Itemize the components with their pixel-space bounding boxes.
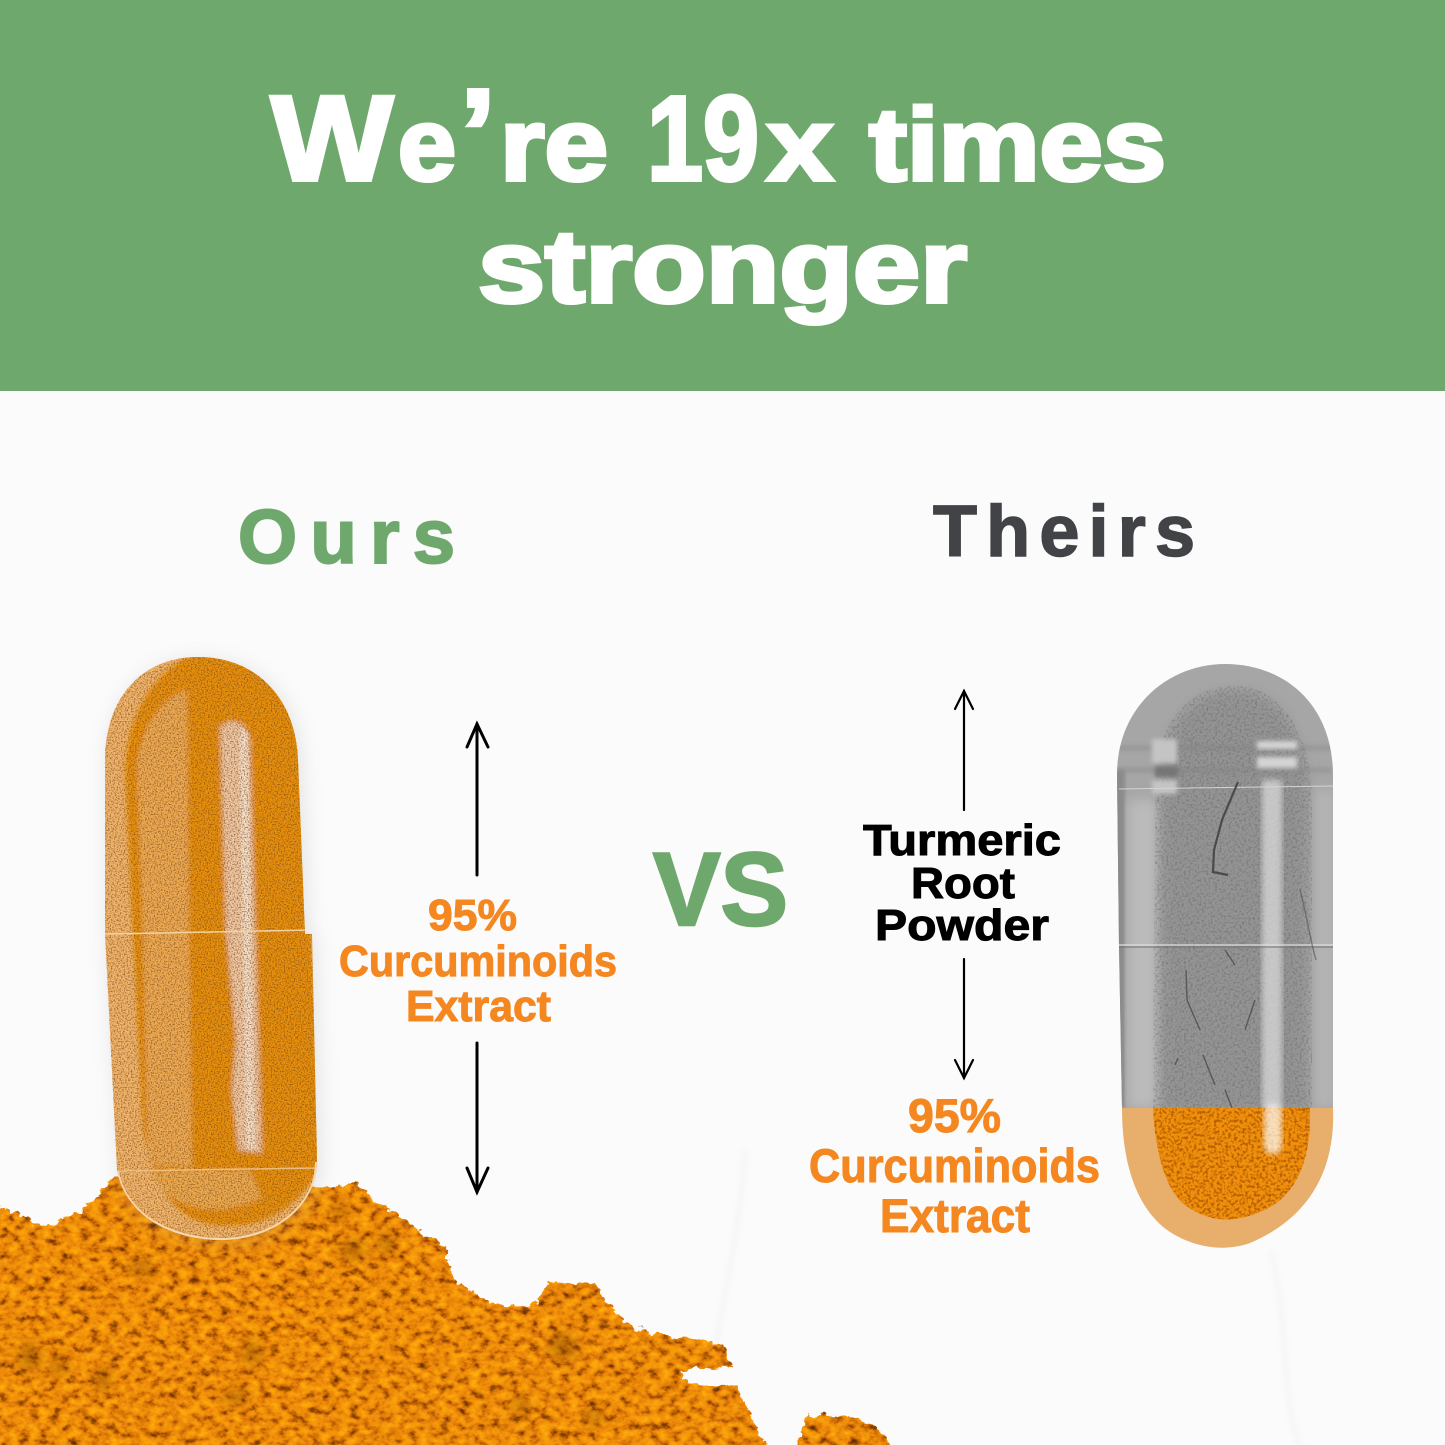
arrow: theirs up	[955, 691, 973, 810]
title: re	[500, 87, 608, 202]
label: turmeric root powder: Powder	[875, 901, 1049, 950]
label: theirs extract: 95%	[908, 1089, 1001, 1142]
orange base	[1122, 1102, 1334, 1248]
capsule: ours	[95, 650, 325, 1250]
arrow: ours down	[467, 1043, 488, 1192]
label: turmeric root powder: Turmeric	[863, 816, 1061, 865]
label: theirs extract: Curcuminoids	[809, 1139, 1100, 1192]
heading: Ours: Ours	[238, 495, 455, 580]
grey upper shell	[1108, 660, 1340, 1112]
heading: Theirs: Theirs	[933, 492, 1195, 572]
title: ’	[460, 64, 496, 203]
label: ours extract: 95%	[428, 891, 517, 940]
powder cracks	[1175, 782, 1316, 1108]
label: theirs extract: Extract	[880, 1189, 1030, 1242]
label: turmeric root powder: Root	[911, 859, 1015, 908]
title: e	[398, 87, 456, 202]
header band	[0, 0, 1445, 391]
powder pile	[0, 1177, 902, 1445]
label: theirs extract	[809, 1089, 1100, 1242]
title: W	[271, 70, 394, 206]
title: times	[869, 87, 1166, 202]
arrow: ours up	[467, 724, 488, 875]
title: stronger	[478, 209, 967, 324]
label: ours extract: Curcuminoids	[339, 937, 617, 986]
label: turmeric root powder	[863, 816, 1061, 950]
arrow: theirs down	[955, 959, 973, 1078]
paper background	[0, 391, 1445, 1445]
title: x	[767, 87, 833, 202]
label: ours extract	[339, 891, 617, 1031]
capsule: theirs	[1108, 660, 1340, 1258]
title	[271, 64, 1166, 324]
label: ours extract: Extract	[406, 982, 551, 1031]
title: 19	[647, 70, 759, 206]
vs label: VS	[653, 832, 788, 948]
